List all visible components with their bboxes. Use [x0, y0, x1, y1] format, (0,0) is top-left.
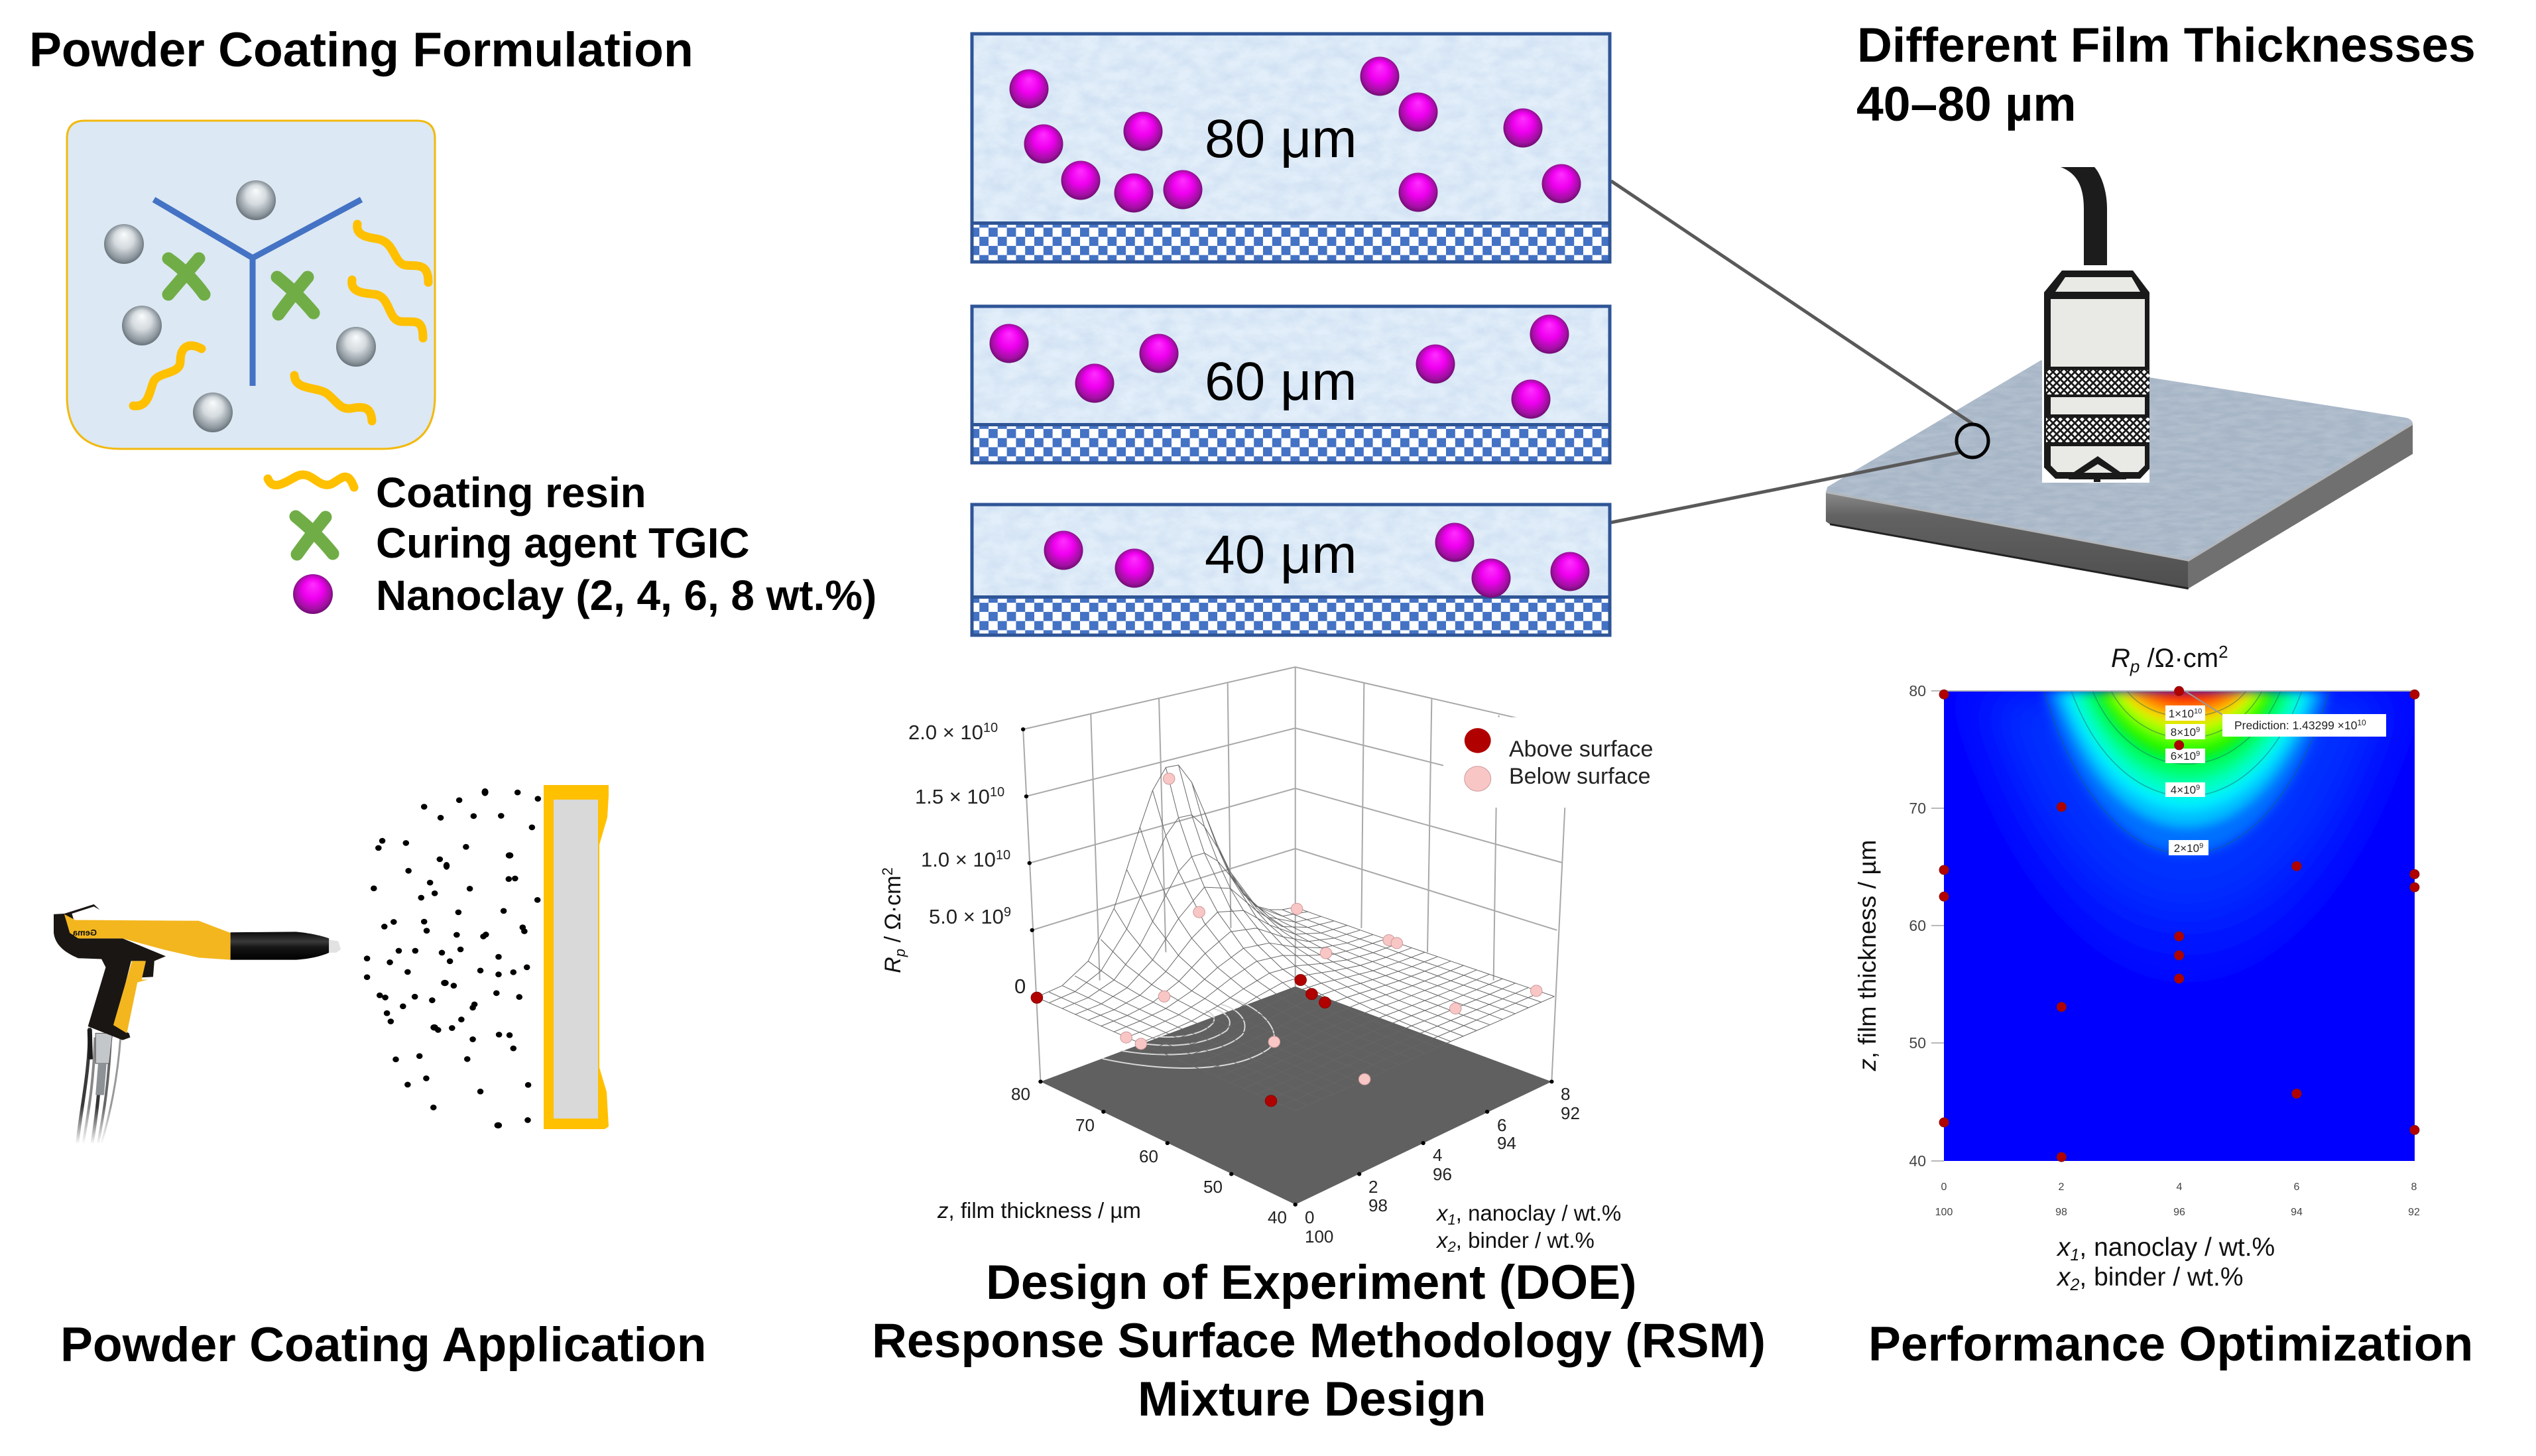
nanoclay and binder axis tick labels: 8 — [1561, 1084, 1570, 1104]
nanoclay and binder axis tick labels: 96 — [1433, 1164, 1452, 1184]
x axis tick labels: 96 — [2173, 1207, 2185, 1218]
y axis tick labels: 70 — [1909, 800, 1926, 817]
legend text: Coating resin — [376, 469, 646, 516]
axis title: nanoclay and binder: , binder / wt.% — [1456, 1228, 1595, 1252]
chart walls — [1023, 667, 1565, 1081]
heading: powder coating application: Powder Coating Application — [60, 1317, 707, 1372]
x axis tick labels: 100 — [1935, 1207, 1953, 1218]
coated plate — [1826, 360, 2413, 589]
gun body yellow — [64, 914, 231, 960]
heading: DOE, RSM, mixture design: Mixture Design — [1138, 1372, 1486, 1426]
nanoclay and binder axis tick labels: 0 — [1305, 1207, 1314, 1227]
contour labels — [2165, 705, 2208, 855]
contour labels: 10 — [2194, 707, 2202, 715]
z axis labels: Rp: 2.0 × 10 — [908, 721, 983, 744]
panel: 40 µm film — [972, 505, 1610, 635]
x axis tick labels: 4 — [2177, 1182, 2183, 1193]
axis title: nanoclay and binder: 2 — [1447, 1239, 1456, 1255]
x axis titles: , nanoclay / wt.% — [2079, 1233, 2275, 1262]
nanoclay and binder axis tick labels: 2 — [1368, 1177, 1378, 1197]
plot frame and ticks — [1931, 691, 2415, 1161]
gun handle black — [54, 904, 166, 1040]
nanoclay and binder axis tick labels: 100 — [1305, 1227, 1333, 1246]
y axis tick labels: 50 — [1909, 1034, 1926, 1052]
y axis tick labels: 40 — [1909, 1152, 1926, 1170]
z axis labels: Rp: 9 — [1004, 905, 1011, 920]
x axis titles: 2 — [2070, 1276, 2079, 1294]
circle: measurement spot — [1957, 424, 1988, 457]
nanoclay and binder axis tick labels: 94 — [1497, 1133, 1516, 1153]
legend labels: Below surface — [1509, 764, 1651, 789]
icon: resin wave — [268, 475, 354, 487]
x axis tick labels: 92 — [2408, 1207, 2420, 1218]
y axis tick labels: 60 — [1909, 917, 1926, 934]
axis title: Rp: 2 — [879, 867, 896, 876]
y axis tick labels: 80 — [1909, 682, 1926, 699]
powder particles — [364, 788, 541, 1128]
x axis titles: 1 — [2070, 1246, 2079, 1264]
panel: coated plate with probe — [1826, 167, 2413, 589]
panel: 80 µm film: 80 μm — [1205, 109, 1357, 169]
heading: different film thicknesses: Different Film Thicknesses — [1857, 18, 2476, 72]
coated substrate panel — [544, 785, 609, 1129]
contour plot title: /Ω·cm — [2140, 644, 2218, 673]
heading: performance optimization: Performance Optimization — [1868, 1317, 2473, 1371]
prediction callout: 10 — [2357, 718, 2366, 727]
axis title: nanoclay and binder: 1 — [1448, 1211, 1456, 1228]
probe cable — [2061, 167, 2107, 271]
silver spheres — [104, 180, 376, 432]
x axis titles: x — [2056, 1233, 2071, 1262]
x axis titles — [2056, 1233, 2275, 1294]
below-surface points — [1120, 773, 1542, 1085]
z axis labels: Rp: 10 — [996, 848, 1010, 863]
x axis tick labels: 94 — [2291, 1207, 2303, 1218]
y axis title: z, film thickness / µm — [1853, 840, 1881, 1071]
z axis labels: Rp: 1.0 × 10 — [921, 848, 996, 871]
contour plot title: p — [2130, 656, 2140, 676]
thickness axis tick labels: 60 — [1139, 1146, 1158, 1166]
panel: 80 µm film — [972, 34, 1610, 262]
title: powder coating formulation: Powder Coating Formulation — [29, 23, 694, 77]
container box — [67, 121, 435, 449]
contour labels: 8×10 — [2171, 726, 2196, 739]
z axis labels: Rp — [908, 721, 1026, 998]
panel: powder spray gun — [54, 904, 341, 1144]
heading: DOE, RSM, mixture design: Response Surface Methodology (RSM) — [872, 1313, 1766, 1368]
z axis labels: Rp: 5.0 × 10 — [929, 905, 1004, 928]
panel: 40 µm film: 40 μm — [1205, 524, 1357, 585]
x axis tick labels: 0 — [1941, 1182, 1947, 1193]
contour labels: 9 — [2196, 726, 2200, 734]
design points — [1939, 686, 2419, 1162]
thickness axis tick labels: 40 — [1268, 1207, 1287, 1227]
z axis labels: Rp: 10 — [983, 721, 998, 735]
nanoclay and binder axis tick labels: 4 — [1433, 1145, 1442, 1165]
z axis labels: Rp: 0 — [1014, 975, 1026, 998]
thickness axis tick labels: 50 — [1203, 1177, 1223, 1197]
y axis tick labels — [1909, 682, 1926, 1170]
axis tick dots — [1021, 727, 1554, 1207]
icon: blue binder Y — [154, 200, 361, 386]
x axis titles: x — [2056, 1263, 2071, 1292]
chart: 3D response surface — [879, 667, 1658, 1255]
connector lines to measurement point — [1611, 181, 1972, 522]
prediction callout: Prediction: 1.43299 ×10 — [2234, 719, 2357, 732]
axis title: film thickness: z, film thickness / µm — [937, 1198, 1141, 1223]
contour plot title: R — [2111, 644, 2130, 673]
x axis titles: , binder / wt.% — [2079, 1263, 2244, 1292]
heading: different film thicknesses: 40–80 µm — [1856, 77, 2077, 131]
z axis labels: Rp: 1.5 × 10 — [915, 785, 990, 808]
heading: DOE, RSM, mixture design — [872, 1255, 1766, 1426]
axis title: nanoclay and binder: x — [1435, 1201, 1449, 1225]
icon: yellow resin chains — [133, 224, 428, 421]
heading: different film thicknesses — [1856, 18, 2476, 131]
nanoclay and binder axis tick labels: 98 — [1368, 1195, 1388, 1215]
thickness axis tick labels — [1011, 1084, 1287, 1227]
contour labels: 6×10 — [2171, 750, 2196, 762]
gun grip yellow — [113, 961, 148, 1033]
axis title: nanoclay and binder — [1435, 1201, 1621, 1255]
heading: DOE, RSM, mixture design: Design of Experiment (DOE) — [986, 1255, 1636, 1309]
legend labels: Above surface — [1509, 737, 1653, 762]
heatmap — [1944, 691, 2415, 1161]
x axis tick labels: 98 — [2055, 1207, 2067, 1218]
contour labels: 2×10 — [2174, 842, 2199, 855]
contour labels: 1×10 — [2169, 707, 2194, 720]
leader line — [2186, 692, 2222, 715]
z axis labels: Rp: 10 — [990, 785, 1004, 800]
panel: formulation beaker — [67, 121, 435, 449]
contour plot title: 2 — [2218, 642, 2228, 662]
icon: nanoclay sphere — [293, 574, 333, 614]
contour labels: 9 — [2199, 842, 2203, 850]
contour labels: 9 — [2196, 784, 2200, 792]
x axis tick labels: 2 — [2059, 1182, 2065, 1193]
x axis tick labels — [1935, 1182, 2420, 1218]
thickness axis tick labels: 70 — [1075, 1115, 1095, 1135]
nanoclay and binder axis tick labels — [1305, 1084, 1580, 1246]
contour labels: 4×10 — [2171, 784, 2196, 796]
legend text — [376, 469, 876, 619]
axis title: nanoclay and binder: x — [1435, 1228, 1449, 1252]
thickness axis tick labels: 80 — [1011, 1084, 1030, 1104]
legend labels — [1509, 737, 1653, 789]
icon: green curing agent crosses — [168, 259, 314, 314]
icon: curing agent cross — [296, 516, 333, 554]
probe body — [2042, 265, 2149, 483]
axis title: nanoclay and binder: , nanoclay / wt.% — [1456, 1201, 1621, 1225]
axis title: Rp: R — [880, 957, 906, 973]
surface mesh — [1036, 765, 1554, 1111]
x axis tick labels: 6 — [2294, 1182, 2300, 1193]
legend background and markers — [1446, 717, 1658, 806]
above-surface points — [1031, 975, 1331, 1107]
nanoclay and binder axis tick labels: 6 — [1497, 1115, 1506, 1135]
floor contours — [1103, 999, 1274, 1068]
prediction callout — [2222, 714, 2386, 737]
floor — [1040, 987, 1551, 1205]
gun nozzle — [329, 940, 341, 953]
axis title: Rp: p — [892, 949, 908, 957]
x axis tick labels: 8 — [2411, 1182, 2417, 1193]
gun logo: Gema — [72, 928, 97, 938]
hoses — [78, 1028, 121, 1143]
legend: formulation components — [268, 469, 876, 619]
panel: 60 µm film: 60 μm — [1205, 351, 1357, 412]
chart: contour plot — [1853, 642, 2420, 1294]
contour labels: 9 — [2196, 750, 2200, 758]
panel: 60 µm film — [972, 306, 1611, 463]
nanoclay and binder axis tick labels: 92 — [1561, 1103, 1580, 1123]
gun barrel — [231, 932, 329, 960]
legend text: Curing agent TGIC — [376, 519, 750, 567]
axis title: Rp: / Ω·cm — [880, 876, 906, 949]
legend text: Nanoclay (2, 4, 6, 8 wt.%) — [376, 572, 876, 619]
